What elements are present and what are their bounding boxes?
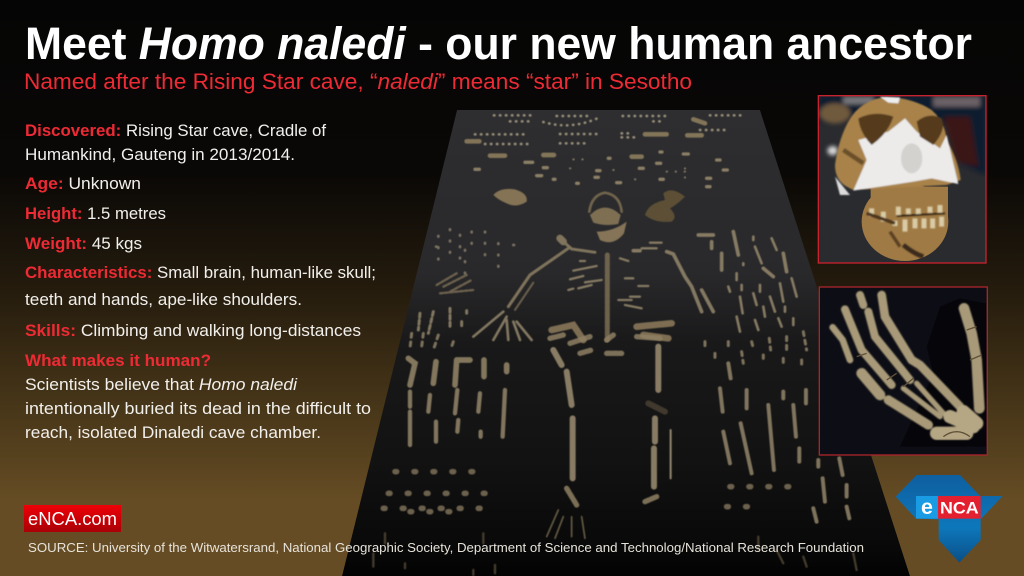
photo: fossil bones laid out on a dark table bbox=[342, 110, 910, 576]
jaw bbox=[862, 182, 948, 261]
fact: what makes it human: Scientists believe that Homo naledi bbox=[25, 375, 298, 394]
fact: characteristics: teeth and hands, ape-like shoulders. bbox=[25, 290, 302, 309]
title: Meet Homo naledi - our new human ancestor bbox=[25, 18, 972, 69]
fact: discovered bbox=[25, 121, 326, 164]
pelvis and carpal clusters bbox=[552, 323, 672, 340]
fact: what makes it human: reach, isolated Dinaledi cave chamber. bbox=[25, 423, 321, 442]
fact: discovered: Humankind, Gauteng in 2013/2014. bbox=[25, 145, 295, 164]
fact: what makes it human bbox=[25, 351, 371, 442]
logo: eNCA diamond: e bbox=[921, 495, 933, 519]
small hand and foot bones left bbox=[436, 229, 515, 273]
cranial fragments bbox=[493, 189, 527, 205]
left arm bbox=[563, 242, 595, 252]
photo: naledi skull bbox=[818, 96, 986, 263]
logo: eNCA.com badge: eNCA.com bbox=[28, 508, 117, 529]
thumb bbox=[964, 308, 979, 408]
fact list bbox=[25, 121, 376, 442]
cranium bbox=[835, 97, 961, 190]
ribs and spine bbox=[568, 261, 602, 290]
fact: characteristics: Characteristics: Small brain, human-like skull; bbox=[25, 263, 376, 282]
logo: eNCA diamond: NCA bbox=[940, 499, 979, 518]
photo: fossil hand bbox=[819, 287, 987, 455]
fact: age: Age: Unknown bbox=[25, 174, 141, 193]
fingers bbox=[833, 327, 850, 360]
source: SOURCE: University of the Witwatersrand, National Geographic Society, Department of Science and Technolog/National Research Foundation bbox=[28, 540, 864, 555]
fact: discovered: Discovered: Rising Star cave, Cradle of bbox=[25, 121, 326, 140]
logo: eNCA diamond bbox=[896, 475, 1003, 563]
lower bones: legs, feet and long bones bbox=[373, 332, 857, 575]
fact: weight: Weight: 45 kgs bbox=[25, 234, 142, 253]
nasal bbox=[901, 143, 922, 173]
subtitle: Named after the Rising Star cave, “ naledi” means “star” in Sesotho bbox=[24, 69, 692, 94]
fact: characteristics bbox=[25, 263, 376, 309]
fact: what makes it human: intentionally buried its dead in the difficult to bbox=[25, 399, 371, 418]
fact: what makes it human: What makes it human? bbox=[25, 351, 211, 370]
plaster face bbox=[853, 118, 958, 191]
eye sockets bbox=[858, 114, 893, 145]
wrist bbox=[937, 412, 977, 433]
fact: skills: Skills: Climbing and walking long-distances bbox=[25, 321, 361, 340]
teeth bbox=[872, 205, 942, 232]
right arm bbox=[667, 252, 713, 312]
upper bones: teeth, skull fragments and ribs bbox=[418, 115, 797, 340]
fact: height: Height: 1.5 metres bbox=[25, 204, 166, 223]
bones right bbox=[633, 232, 797, 332]
